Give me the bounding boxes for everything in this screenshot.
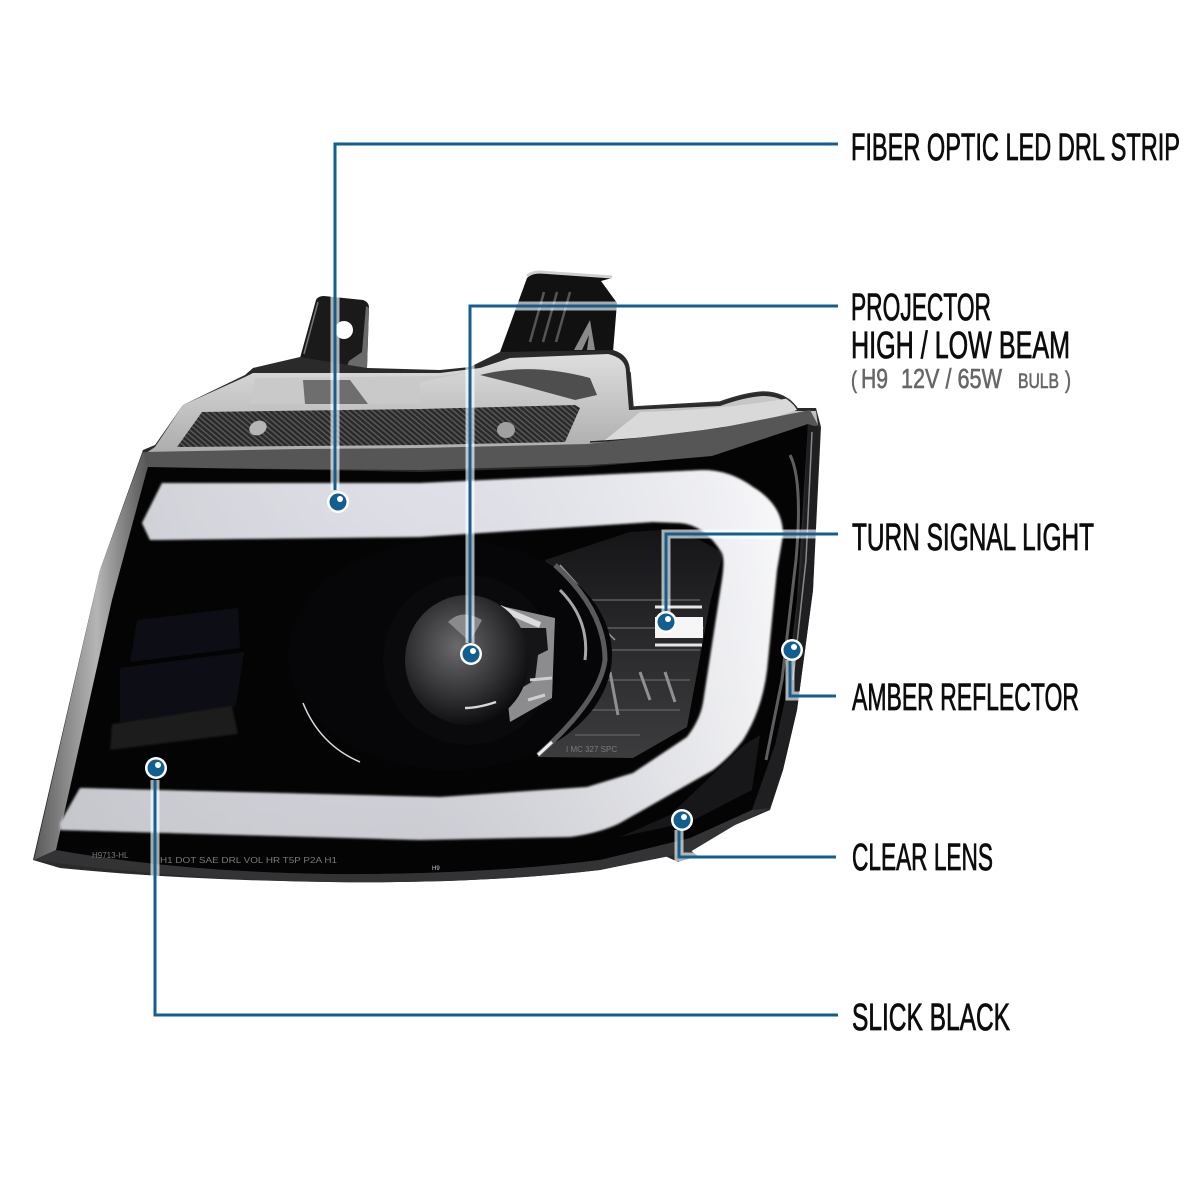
left lens edge <box>34 452 148 860</box>
label: ) <box>1065 367 1071 394</box>
label: 12V / 65W <box>901 363 1002 394</box>
leader line <box>666 534 838 612</box>
marker dot <box>460 643 482 665</box>
callout: slick black <box>145 757 1010 1039</box>
black lens body <box>54 424 808 874</box>
marker dot <box>671 809 693 831</box>
leader line <box>679 830 836 857</box>
lower right dark corner panel <box>620 735 760 837</box>
clear upper housing <box>143 354 818 462</box>
callout: projector high / low beam <box>460 287 1071 665</box>
turn signal reflector: I MC 327 SPC <box>566 745 617 754</box>
callout: fiber optic LED DRL strip <box>327 127 1180 513</box>
moulded lens markings <box>92 851 440 872</box>
left mounting bracket <box>300 296 369 371</box>
label: PROJECTOR <box>851 287 991 329</box>
carbon fibre strip <box>177 405 580 447</box>
marker dot <box>655 611 677 633</box>
leader line <box>470 306 838 643</box>
label: BULB <box>1018 370 1059 393</box>
leader line <box>790 660 836 696</box>
bottom trim <box>34 808 770 882</box>
fiber optic DRL strip <box>60 470 783 840</box>
label: H9 <box>861 363 888 394</box>
callout: turn signal light <box>655 517 1094 633</box>
label: HIGH / LOW BEAM <box>851 325 1070 367</box>
label: ( <box>851 367 857 394</box>
moulded lens markings: H9713-HL <box>92 851 129 860</box>
moulded lens markings: H1 DOT SAE DRL VOL HR T5P P2A H1 <box>160 856 338 865</box>
headlight photo illustration <box>33 272 821 882</box>
moulded lens markings: H9 <box>432 866 440 872</box>
left fins <box>110 608 244 750</box>
projector housing ring <box>288 540 612 770</box>
marker dot <box>781 639 803 661</box>
label: SLICK BLACK <box>852 997 1010 1039</box>
right lens edge <box>752 424 820 810</box>
marker dot <box>327 491 349 513</box>
right mounting bracket <box>500 272 617 352</box>
label: CLEAR LENS <box>852 837 993 879</box>
turn signal reflector <box>537 530 723 758</box>
callout: clear lens <box>671 809 993 879</box>
callout: amber reflector <box>781 639 1079 719</box>
projector lens <box>405 595 555 725</box>
leader line <box>335 144 838 490</box>
leader line <box>155 780 838 1015</box>
textured rim <box>143 410 818 470</box>
housing silhouette <box>33 350 821 882</box>
marker dot <box>145 757 167 779</box>
adjuster screws <box>247 418 515 438</box>
label <box>851 287 1071 394</box>
